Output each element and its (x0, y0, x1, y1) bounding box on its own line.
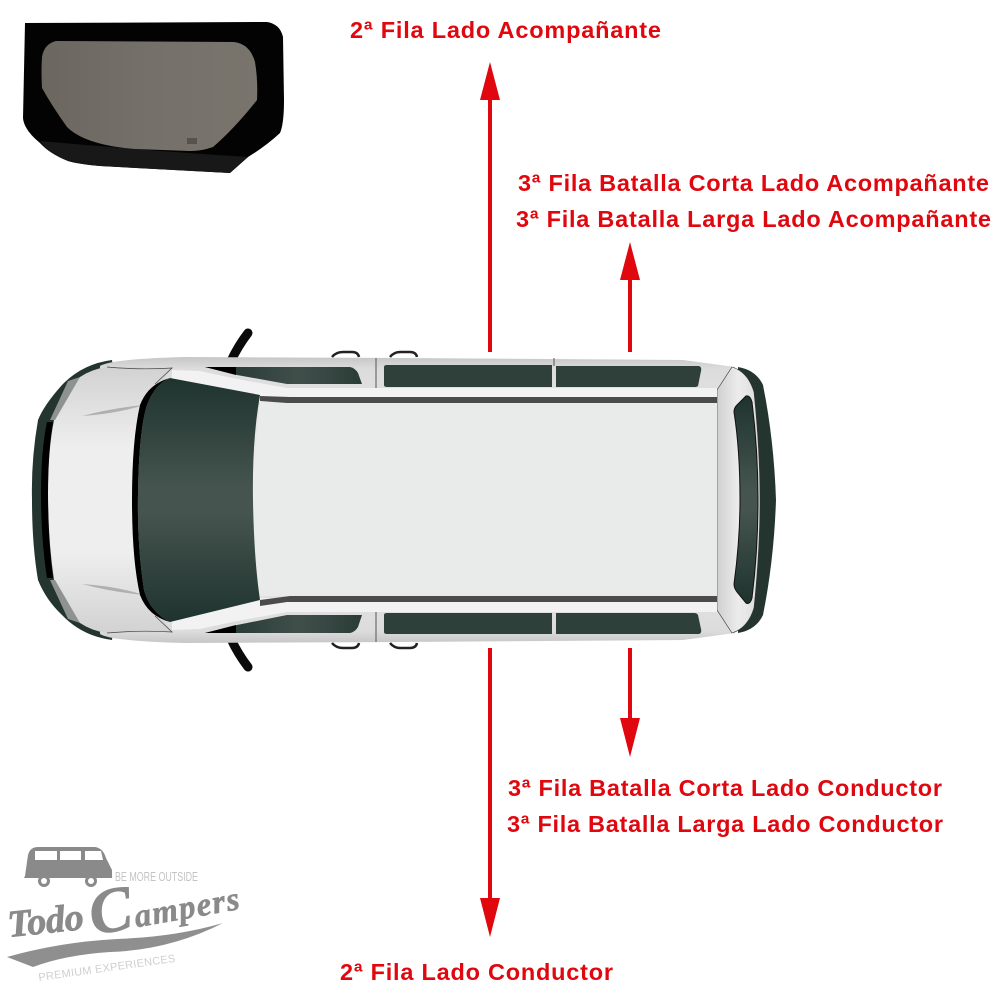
heading: 2nd row passenger side: 2ª Fila Lado Acompañante (350, 17, 661, 43)
logo icon: camper van (24, 847, 112, 887)
rear window (734, 396, 758, 603)
side window: top front (205, 367, 362, 384)
body door lines (376, 358, 554, 642)
roof panel (254, 402, 717, 596)
arrow: up to 3rd row passenger side (620, 242, 640, 352)
mirror: top (231, 333, 248, 361)
logo wordmark: Todo: Todo (6, 896, 86, 946)
front grille black line (41, 422, 53, 578)
side window: 2nd row bottom (384, 613, 552, 634)
arrow: up to 2nd row passenger side (480, 62, 500, 352)
arrow: down to 2nd row driver side (480, 648, 500, 937)
side window: 3rd row bottom (556, 613, 701, 634)
logo swoosh (7, 923, 223, 967)
headlight trim bottom (50, 580, 80, 623)
roof rack handles (332, 352, 417, 648)
logo tagline: BE MORE OUTSIDE (115, 869, 198, 884)
side window: 3rd row top (556, 366, 701, 387)
side window: bottom front (205, 615, 362, 633)
heading: 3rd row long wheelbase driver side: 3ª Fila Batalla Larga Lado Conductor (507, 811, 943, 837)
pillar and rail band bottom (172, 598, 717, 630)
hood creases (82, 405, 144, 416)
hood (48, 367, 172, 633)
headlight trim top (50, 377, 80, 420)
arrow: down to 3rd row driver side (620, 648, 640, 757)
heading: 3rd row long wheelbase passenger side: 3ª Fila Batalla Larga Lado Acompañante (516, 206, 991, 232)
hood thin outline bottom (107, 616, 172, 633)
logo: Todo Campers (6, 847, 243, 984)
rear dark band (738, 367, 776, 633)
rear bumper panel (717, 367, 760, 633)
van top view (32, 333, 776, 667)
mirror: bottom (231, 639, 248, 667)
pillar and rail band top (172, 370, 717, 402)
front dark edge (32, 360, 130, 640)
black window corner top (205, 367, 236, 375)
windshield (138, 378, 260, 622)
side window: 2nd row top (384, 365, 552, 387)
heading: 3rd row short wheelbase passenger side: 3ª Fila Batalla Corta Lado Acompañante (518, 170, 989, 196)
heading: 3rd row short wheelbase driver side: 3ª Fila Batalla Corta Lado Conductor (508, 775, 942, 801)
logo subtitle: PREMIUM EXPERIENCES (38, 953, 176, 984)
heading: 2nd row driver side: 2ª Fila Lado Conductor (340, 959, 613, 985)
logo wordmark: Campers: Campers (83, 853, 243, 949)
black window corner bottom (205, 625, 236, 633)
roof rail: bottom (260, 596, 717, 606)
hood thin outline top (107, 367, 172, 384)
windshield black seal (132, 378, 170, 622)
roof rail: top (260, 396, 717, 403)
product photo: side window glass (23, 22, 284, 173)
van body (100, 357, 735, 643)
